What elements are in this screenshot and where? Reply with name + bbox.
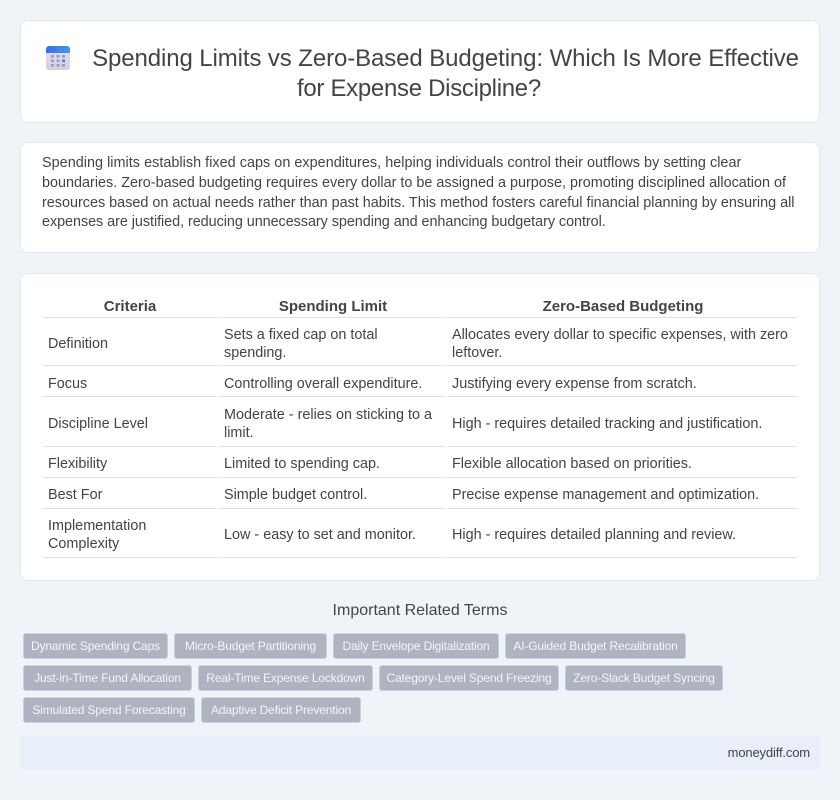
title: Spending Limits vs Zero-Based Budgeting: Which Is More Effective (92, 45, 799, 72)
tag (174, 633, 327, 659)
header row: Spending Limit (279, 298, 387, 315)
intro paragraph: Spending limits establish fixed caps on expenditures, helping individuals control their outflows by setting clear (42, 155, 741, 171)
intro paragraph: resources based on actual needs rather than past habits. This method fosters careful financial planning by ensuring all (42, 195, 794, 211)
row: focus: Justifying every expense from scratch. (452, 376, 697, 392)
tag: Adaptive Deficit Prevention (211, 703, 351, 717)
title (92, 45, 799, 102)
tag: AI-Guided Budget Recalibration (513, 639, 678, 653)
tag: Daily Envelope Digitalization (342, 639, 490, 653)
panel: comparison table (20, 273, 820, 581)
row: flexibility: Flexibility (48, 456, 107, 472)
title: for Expense Discipline? (297, 75, 541, 102)
row: best for: Best For (48, 487, 102, 503)
tag (333, 633, 499, 659)
row: implementation complexity: Implementation (48, 518, 146, 534)
row: definition: spending. (224, 345, 286, 361)
tag: Category-Level Spend Freezing (386, 671, 552, 685)
heading: related terms: Important Related Terms (333, 602, 507, 619)
row: definition: Sets a fixed cap on total (224, 327, 378, 343)
tag: Zero-Slack Budget Syncing (573, 671, 715, 685)
row: definition: Definition (48, 336, 108, 352)
intro paragraph (42, 155, 794, 230)
row: implementation complexity: Complexity (48, 536, 119, 552)
tag: Real-Time Expense Lockdown (206, 671, 365, 685)
tag (23, 633, 168, 659)
tag: Simulated Spend Forecasting (32, 703, 186, 717)
row: definition: Allocates every dollar to specific expenses, with zero (452, 327, 788, 343)
tag: Micro-Budget Partitioning (185, 639, 316, 653)
tag (198, 665, 373, 691)
row: implementation complexity: Low - easy to set and monitor. (224, 527, 416, 543)
header row: Criteria (104, 298, 156, 315)
row: best for: Simple budget control. (224, 487, 367, 503)
related terms tags (23, 633, 723, 723)
row: implementation complexity (48, 518, 736, 552)
header row: Zero-Based Budgeting (543, 298, 703, 315)
tag (379, 665, 559, 691)
row: best for: Precise expense management and optimization. (452, 487, 759, 503)
row: implementation complexity: High - requires detailed planning and review. (452, 527, 736, 543)
row: focus: Controlling overall expenditure. (224, 376, 422, 392)
footer bar (20, 736, 820, 770)
row: flexibility (48, 456, 692, 472)
row: discipline level: Moderate - relies on sticking to a (224, 407, 432, 423)
row: flexibility: Limited to spending cap. (224, 456, 380, 472)
tag (23, 697, 195, 723)
icon: calendar (46, 46, 70, 70)
tag (23, 665, 192, 691)
title panel (20, 20, 820, 123)
tag: Dynamic Spending Caps (31, 639, 160, 653)
row: discipline level: limit. (224, 425, 254, 441)
intro paragraph: expenses are justified, reducing unnecessary spending and enhancing budgetary control. (42, 214, 606, 230)
footer source: moneydiff.com (728, 745, 810, 760)
comparison table (43, 298, 797, 558)
row: discipline level: Discipline Level (48, 416, 148, 432)
tag (505, 633, 686, 659)
tag (201, 697, 361, 723)
row: focus (48, 376, 697, 392)
row: focus: Focus (48, 376, 87, 392)
row: discipline level: High - requires detailed tracking and justification. (452, 416, 762, 432)
header row (104, 298, 703, 315)
row: flexibility: Flexible allocation based on priorities. (452, 456, 692, 472)
row: definition: leftover. (452, 345, 502, 361)
row: best for (48, 487, 759, 503)
row: discipline level (48, 407, 762, 441)
tag: Just-in-Time Fund Allocation (34, 671, 181, 685)
tag (565, 665, 723, 691)
intro paragraph: boundaries. Zero-based budgeting requires every dollar to be assigned a purpose, promoting disciplined allocation of (42, 175, 786, 191)
row: definition (48, 327, 788, 361)
panel: intro text (20, 142, 820, 253)
